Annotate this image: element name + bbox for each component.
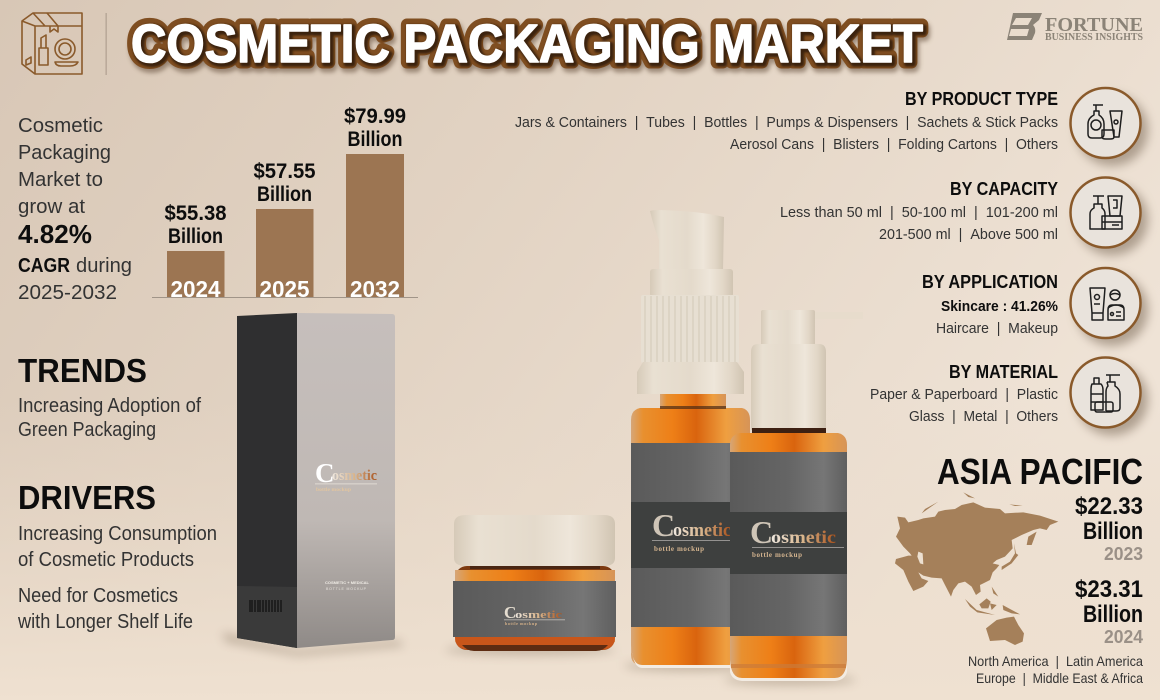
bar 2032 xyxy=(344,105,406,302)
segment: by material: Glass | Metal | Others xyxy=(909,408,1058,425)
icon: product type xyxy=(1070,88,1148,166)
product: carton box: BOTTLE MOCKUP xyxy=(326,587,367,591)
product: carton box: bottle mockup xyxy=(316,487,351,493)
text block: market growth CAGR: during xyxy=(76,255,132,277)
segment: by application xyxy=(922,272,1058,337)
title: COSMETIC PACKAGING MARKET xyxy=(133,16,925,76)
product: large pump bottle: bottle mockup xyxy=(654,545,704,553)
divider xyxy=(106,13,107,75)
bar 2025 xyxy=(254,160,316,302)
icon: cosmetics box xyxy=(22,13,82,74)
bar chart: market size xyxy=(152,105,418,302)
segment: by capacity: 201-500 ml | Above 500 ml xyxy=(879,226,1058,243)
bar 2025: Billion xyxy=(257,183,312,206)
text block: market growth CAGR: Packaging xyxy=(18,142,111,164)
bar 2032: $79.99 xyxy=(344,105,406,128)
text block: market growth CAGR: 4.82% xyxy=(18,219,92,249)
logo: Fortune Business Insights: BUSINESS INSIGHTS xyxy=(1045,32,1143,43)
stat: 2024 xyxy=(1075,576,1143,647)
text block: market growth CAGR: grow at xyxy=(18,196,85,218)
bar 2032: Billion xyxy=(348,128,402,151)
product: jar xyxy=(453,515,616,651)
panel: trends: Increasing Adoption of xyxy=(18,395,201,417)
segment: by product type: Jars & Containers | Tubes | Bottles | Pumps & Dispensers | Sachets & Stick Packs xyxy=(515,114,1058,131)
stat: 2024: $23.31 xyxy=(1075,576,1143,603)
stat: 2023: 2023 xyxy=(1104,544,1143,564)
segment: by application: BY APPLICATION xyxy=(922,272,1058,292)
bar 2024: 2024 xyxy=(170,276,221,302)
text block: market growth CAGR xyxy=(18,115,132,304)
text block: market growth CAGR: Market to xyxy=(18,169,103,191)
product: small pump bottle: osmetic xyxy=(771,527,836,547)
product: jar: C xyxy=(504,603,516,622)
product: carton box: COSMETIC + MEDICAL xyxy=(325,580,370,585)
segment: by application: Skincare : 41.26% xyxy=(941,298,1058,315)
segment: by capacity: BY CAPACITY xyxy=(950,179,1058,199)
product: large pump bottle: C xyxy=(652,507,675,543)
text block: other regions: Europe | Middle East & Africa xyxy=(976,670,1143,686)
segment: by material: Paper & Paperboard | Plastic xyxy=(870,386,1058,403)
product: jar: bottle mockup xyxy=(505,621,538,626)
logo: Fortune Business Insights xyxy=(1007,13,1143,43)
stat: 2023: $22.33 xyxy=(1075,493,1143,520)
segment: by material xyxy=(870,362,1058,425)
panel: drivers: Need for Cosmetics xyxy=(18,585,178,607)
product: small pump bottle xyxy=(730,310,863,681)
stat: 2023: Billion xyxy=(1083,518,1143,545)
product: carton box: C xyxy=(315,458,334,488)
segment: by capacity xyxy=(780,179,1058,243)
panel: trends: TRENDS xyxy=(18,352,147,389)
panel: trends xyxy=(18,352,201,441)
segment: by application: Haircare | Makeup xyxy=(936,320,1058,337)
product: small pump bottle: bottle mockup xyxy=(752,551,802,559)
ground shadows xyxy=(222,632,856,685)
product: large pump bottle: osmetic xyxy=(673,520,731,541)
product: small pump bottle: C xyxy=(750,514,773,550)
segment: by material: BY MATERIAL xyxy=(949,362,1058,382)
segment: by product type xyxy=(515,89,1058,153)
panel: drivers: with Longer Shelf Life xyxy=(17,611,193,633)
bar 2025: 2025 xyxy=(260,276,310,302)
stat: 2024: Billion xyxy=(1083,601,1143,628)
map: Asia Pacific xyxy=(895,492,1058,645)
text block: market growth CAGR: CAGR xyxy=(18,255,70,277)
stat: 2024: 2024 xyxy=(1104,627,1143,647)
product: jar: osmetic xyxy=(515,610,563,621)
panel: drivers: of Cosmetic Products xyxy=(18,549,194,571)
panel: drivers xyxy=(17,479,217,633)
title: COSMETIC PACKAGING MARKET xyxy=(133,18,925,78)
bar 2024 xyxy=(164,202,227,302)
bar 2032: 2032 xyxy=(350,276,400,302)
text block: other regions xyxy=(968,653,1143,686)
product: large pump bottle xyxy=(631,210,750,668)
icon: material xyxy=(1070,358,1148,436)
product: carton box: osmetic xyxy=(332,468,377,484)
text block: market growth CAGR: 2025-2032 xyxy=(18,282,117,304)
icon: capacity xyxy=(1070,178,1148,256)
product: carton box xyxy=(237,313,395,648)
segment: by capacity: Less than 50 ml | 50-100 ml | 101-200 ml xyxy=(780,204,1058,221)
bar 2024: $55.38 xyxy=(164,202,227,225)
stat: 2023 xyxy=(1075,493,1143,564)
segment: by product type: Aerosol Cans | Blisters | Folding Cartons | Others xyxy=(730,136,1058,153)
panel: drivers: Increasing Consumption xyxy=(18,523,217,545)
panel: trends: Green Packaging xyxy=(18,419,156,441)
icon: application xyxy=(1070,268,1148,346)
logo: Fortune Business Insights: FORTUNE xyxy=(1045,14,1143,36)
text block: market growth CAGR: Cosmetic xyxy=(18,115,103,137)
segment: by product type: BY PRODUCT TYPE xyxy=(905,89,1058,109)
panel: drivers: DRIVERS xyxy=(18,479,156,516)
text block: other regions: North America | Latin America xyxy=(968,653,1143,669)
title: COSMETIC PACKAGING MARKET xyxy=(131,14,923,74)
bar 2025: $57.55 xyxy=(254,160,316,183)
bar 2024: Billion xyxy=(168,225,223,248)
title: COSMETIC PACKAGING MARKET xyxy=(131,14,923,74)
